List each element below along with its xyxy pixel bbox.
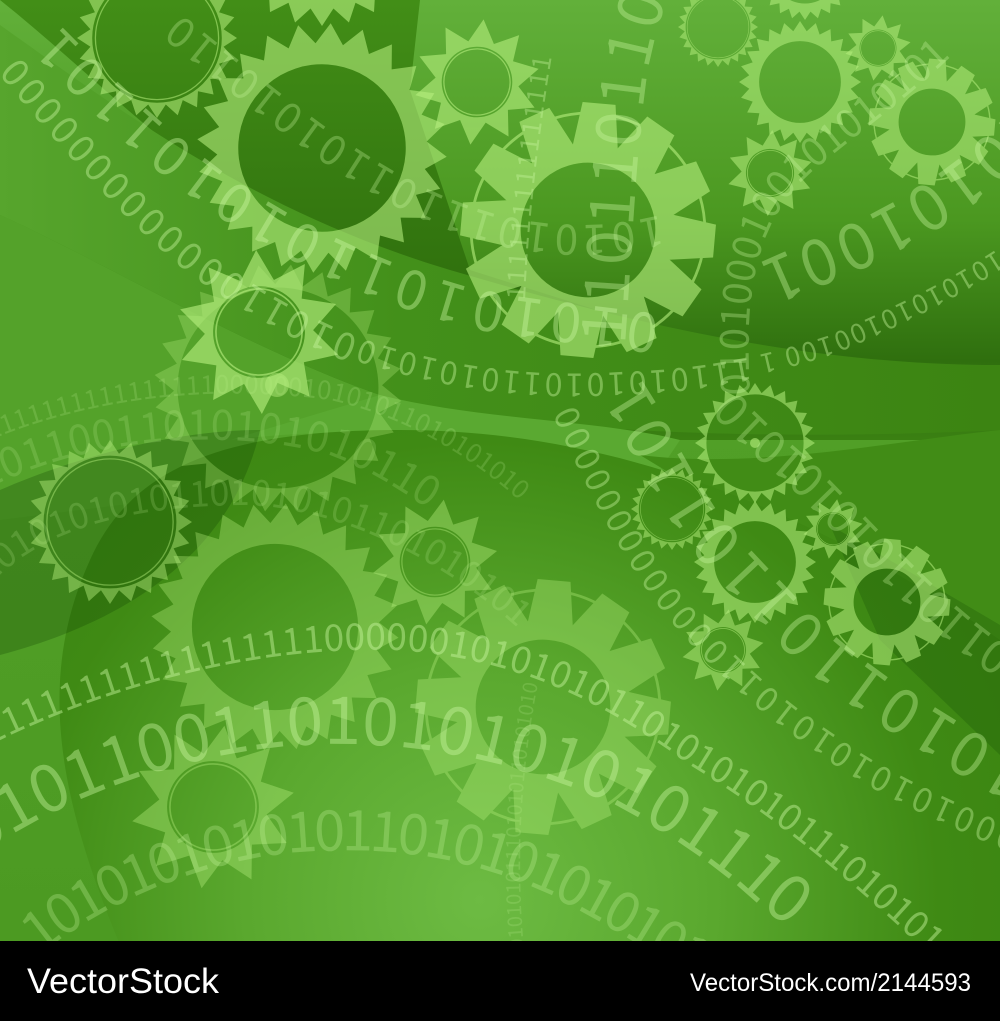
gear: sawtooth top right: [739, 21, 861, 143]
gear: sawtooth cut at top right: [755, 0, 855, 20]
gear: block top right: [864, 54, 1000, 190]
gear: large sawtooth top centre: [189, 15, 455, 281]
gear: thin sawtooth centre right: [695, 383, 815, 503]
gear: thin ring left: [28, 440, 192, 604]
gear: tiny star lower right: [799, 496, 867, 562]
logo text: VectorStock: [27, 962, 220, 1001]
gear: small star right: [718, 122, 822, 224]
gear: small dot in middle left gear: [265, 373, 289, 397]
gear: block lower right: [819, 534, 955, 670]
gear: star lower centre: [363, 492, 507, 632]
binary rows: dim upper-left: 1010101011101010110101010: [506, 683, 537, 941]
gear: star top centre: [403, 10, 551, 154]
binary rows: upper right: 0101000100101010101: [720, 41, 950, 394]
gear: sawtooth cut at top edge: [218, 0, 426, 26]
gear: star middle left: [155, 231, 363, 433]
gear: thin ring top left: [77, 0, 237, 118]
gear: large block bottom centre: [405, 569, 681, 845]
gear: sawtooth lower right: [694, 501, 816, 623]
image id text: VectorStock.com/2144593: [690, 969, 971, 997]
gear: thin ring centre right: [631, 468, 713, 550]
gear: centre dot: [750, 438, 760, 448]
gear: large sawtooth lower left: [141, 493, 409, 761]
gear: large block centre: [450, 92, 726, 368]
binary rows: upper right: 111111111111111: [506, 58, 552, 298]
gear: small star top right: [840, 11, 916, 85]
binary rows: dim upper-left: [0, 375, 537, 941]
binary rows: upper right: [506, 0, 1000, 394]
footer bar: [0, 941, 1000, 1021]
gear: small star lower right: [676, 604, 770, 696]
gear: wide low contrast middle left: [142, 252, 414, 524]
gear: star bottom left: [119, 716, 307, 898]
gear: thin ring top right: [678, 0, 758, 67]
